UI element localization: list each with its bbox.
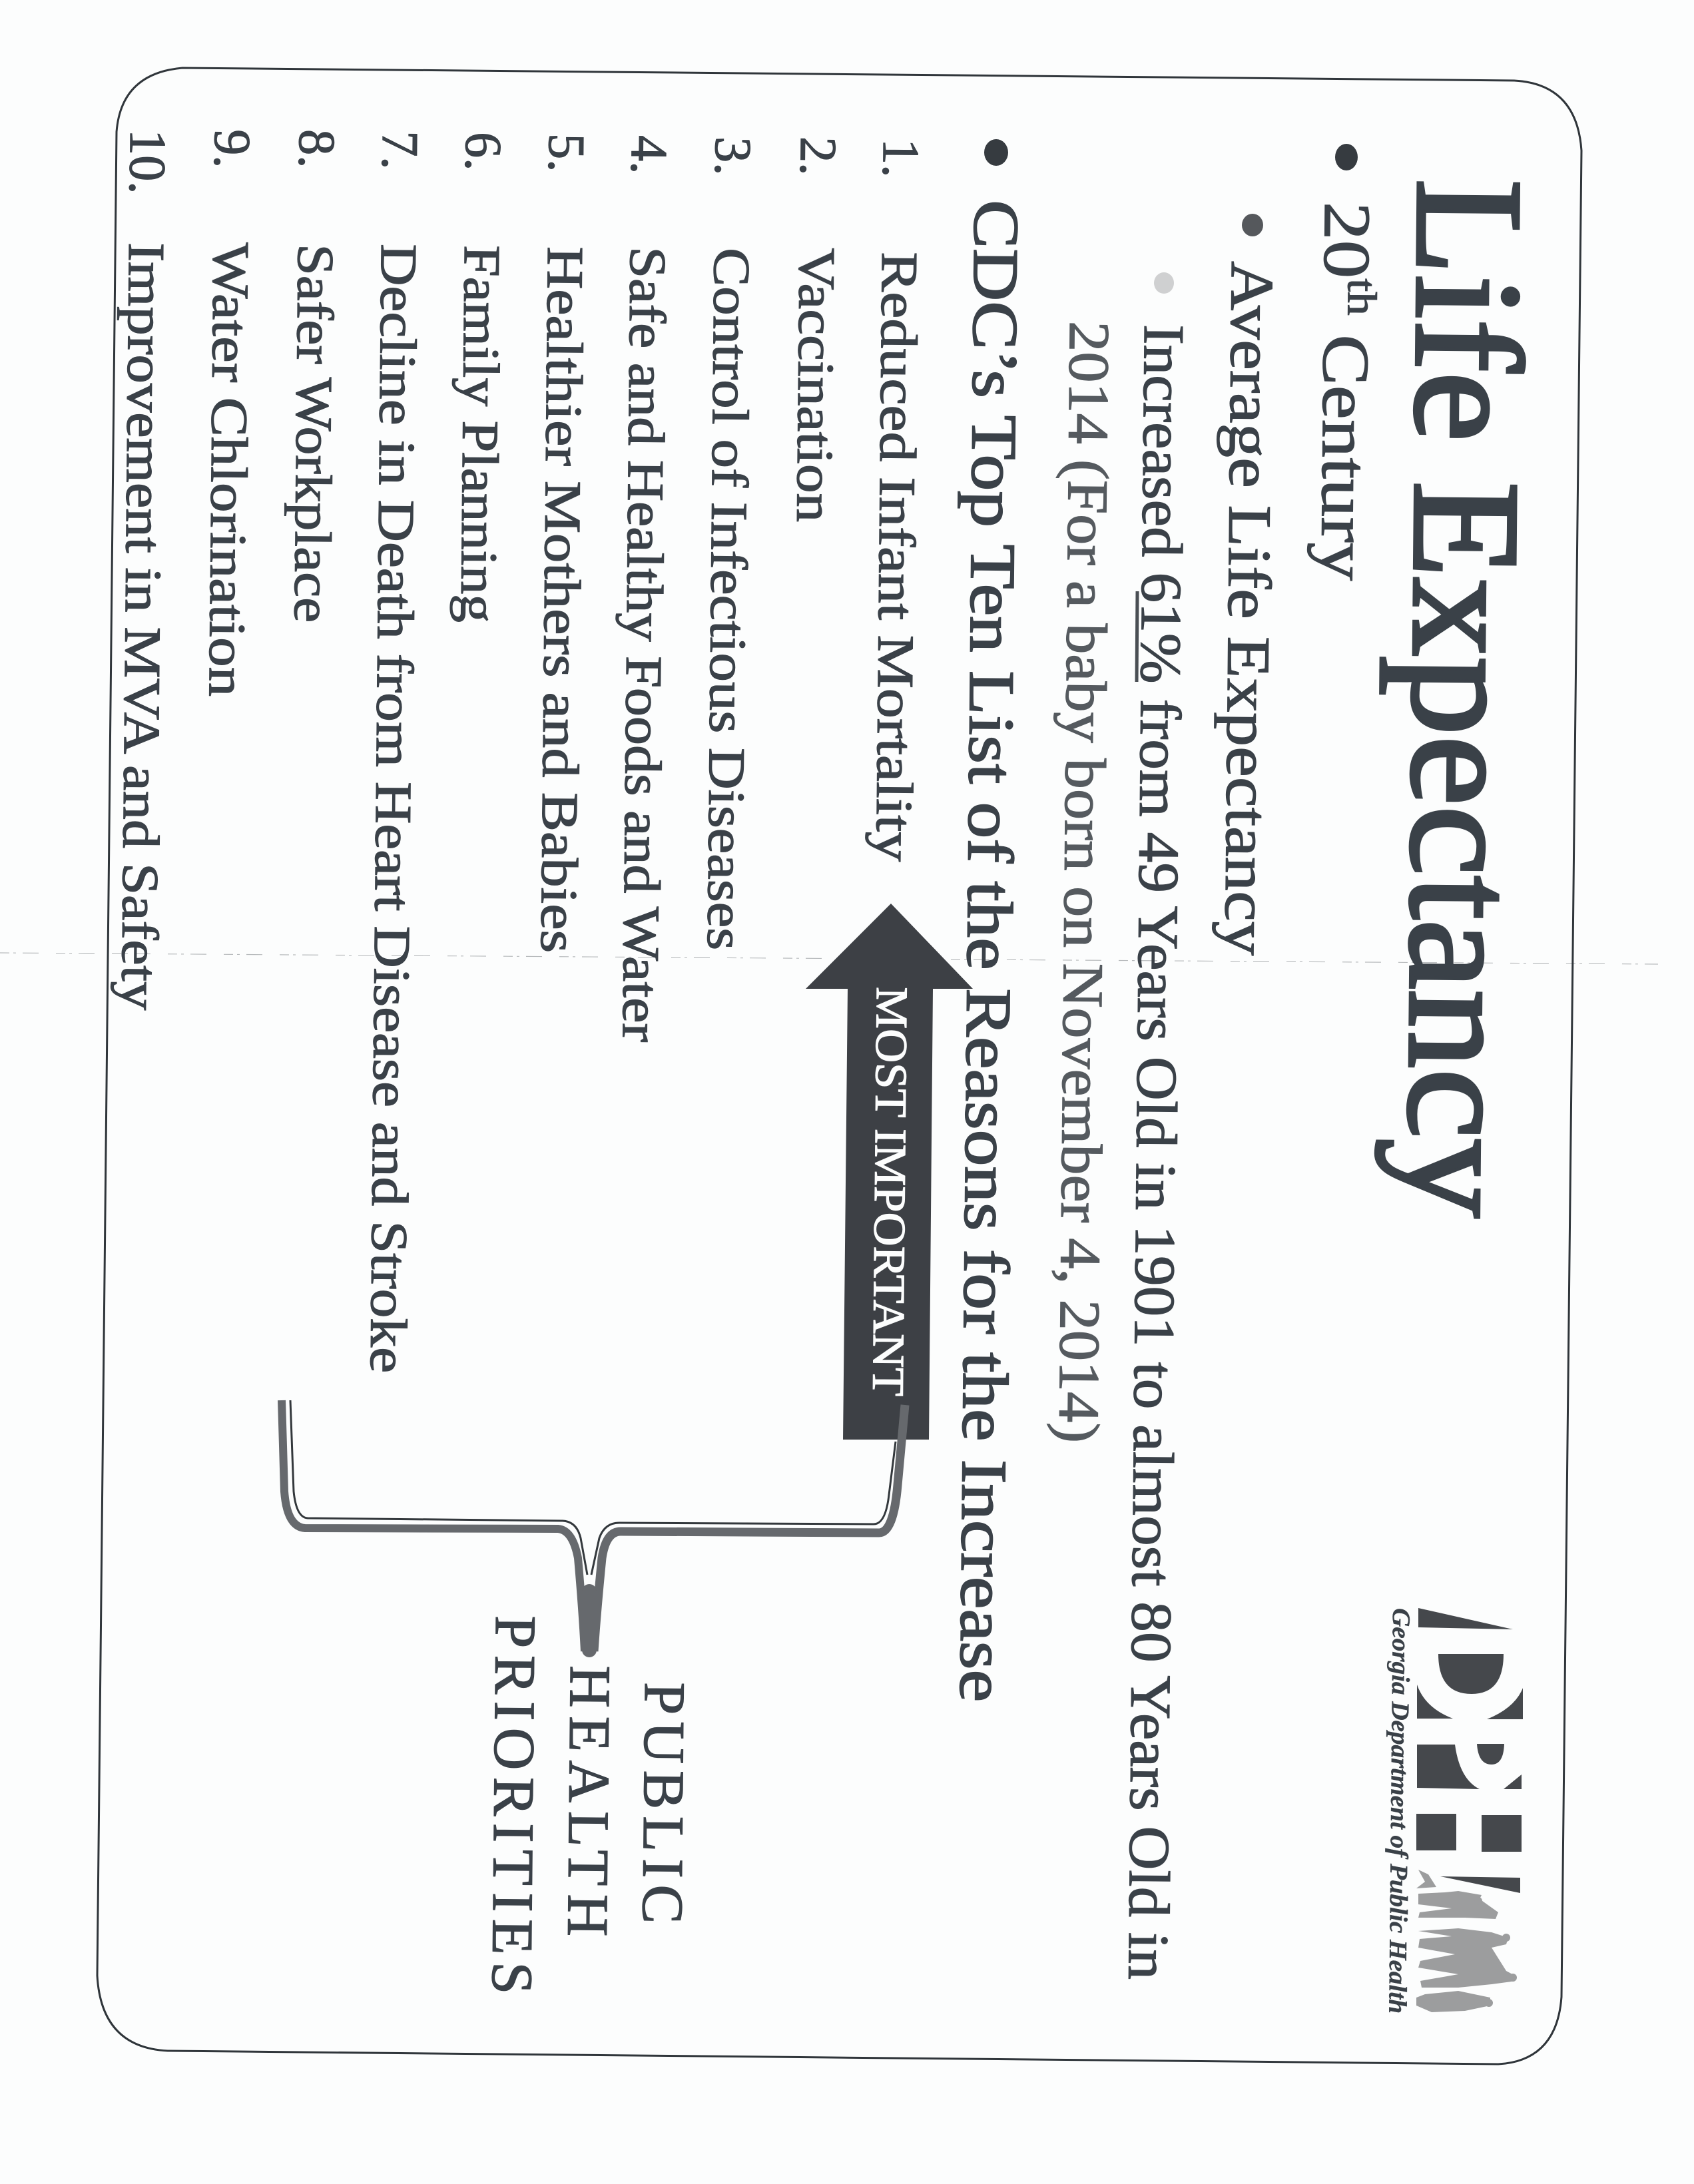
list item 3: 3. (704, 136, 762, 176)
icon: bullet increased (1154, 272, 1174, 294)
text: increased line one: Increased 61% from 49 Years Old in 1901 to almost 80 Years Old in (1116, 324, 1197, 1980)
list: top ten reasons (111, 129, 930, 1374)
list item 10: 10. (119, 129, 177, 194)
list item 6: Family Planning (450, 245, 511, 623)
list item 9: 9. (203, 129, 262, 168)
list item 6: 6. (454, 132, 513, 171)
text: average life expectancy: Average Life Expectancy (1212, 261, 1286, 956)
text: increased line two: 2014 (For a baby born on November 4, 2014) (1047, 321, 1122, 1444)
icon: bullet average life expectancy (1242, 214, 1263, 236)
arrow label: MOST IMPORTANT (863, 987, 918, 1397)
list item 3: Control of Infectious Diseases (697, 248, 761, 951)
list item 7: Decline in Death from Heart Disease and Stroke (360, 244, 428, 1374)
list item 2: 2. (789, 136, 848, 176)
list item 9 (198, 129, 262, 697)
list item 7: 7. (371, 131, 429, 170)
list item 8: Safer Workplace (284, 244, 345, 623)
heading: 20th century: Century (1307, 315, 1383, 581)
list item 5: Healthier Mothers and Babies (530, 246, 595, 954)
arrow: most important (806, 904, 973, 1440)
list item 1: Reduced Infant Mortality (865, 252, 929, 862)
heading: cdc top ten list: CDC’s Top Ten List of the Reasons for the Increase (946, 200, 1032, 1703)
icon: bullet cdc (984, 139, 1008, 166)
list item 6 (450, 132, 513, 623)
heading: 20th century: 20 (1310, 202, 1384, 269)
label: priorities: PRIORITIES (479, 1615, 547, 1995)
brace: public health priorities connector (282, 1400, 905, 1651)
list item 1: 1. (872, 138, 930, 178)
list item 9: Water Chlorination (198, 242, 260, 697)
list item 4: 4. (620, 135, 679, 174)
list item 4: Safe and Healthy Foods and Water (612, 246, 677, 1043)
list item 8: 8. (288, 129, 346, 168)
label: public: PUBLIC (630, 1682, 697, 1924)
icon: georgia dph logo (1383, 1608, 1523, 2014)
title: Life Expectancy (1375, 178, 1555, 1219)
list item 2: Vaccination (786, 248, 846, 523)
logo people silhouettes (1416, 1870, 1517, 2012)
logo caption: Georgia Department of Public Health (1383, 1608, 1415, 2014)
list item 2 (786, 136, 848, 523)
list item 8 (284, 129, 346, 623)
label: health: HEALTH (555, 1665, 622, 1937)
heading: 20th century: th (1338, 278, 1384, 316)
icon: bullet 20th century (1335, 144, 1358, 170)
list item 5: 5. (537, 133, 596, 172)
list item 10: Improvement in MVA and Safety (111, 242, 176, 1011)
